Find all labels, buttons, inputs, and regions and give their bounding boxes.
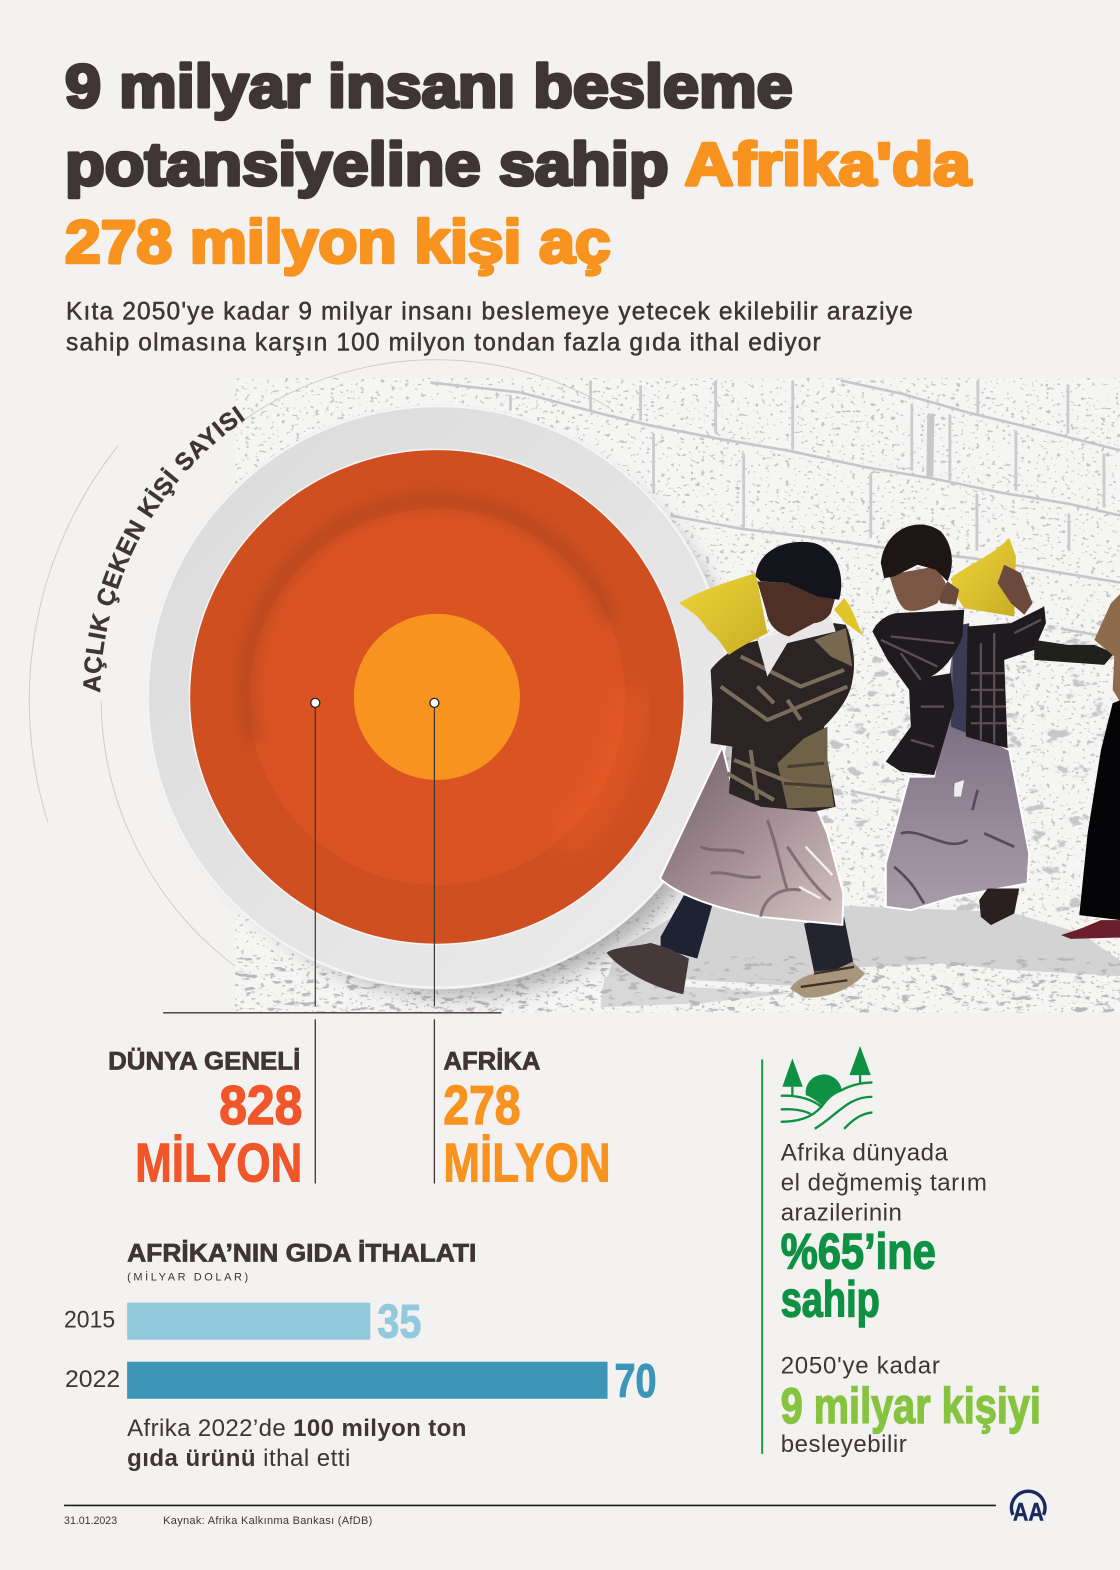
icon: agency logo: AA xyxy=(1013,1498,1044,1526)
bar 2022 xyxy=(65,1354,657,1407)
footer: 31.01.2023 xyxy=(64,1515,117,1527)
import note xyxy=(127,1415,466,1472)
bar 2022: 2022 xyxy=(65,1366,120,1393)
bar chart heading: (MİLYAR DOLAR) xyxy=(127,1271,248,1284)
photo: stone wall and ground background xyxy=(235,378,1120,1012)
icon: farmland with trees xyxy=(781,1046,872,1129)
title: 9 milyar insanı besleme xyxy=(65,53,793,120)
bar 2015: 2015 xyxy=(64,1307,115,1334)
text: feeding capacity by 2050: besleyebilir xyxy=(781,1431,907,1458)
subtitle: sahip olmasına karşın 100 milyon tondan fazla gıda ithal ediyor xyxy=(66,329,821,356)
africa hunger circle: 278 million xyxy=(354,614,520,780)
subtitle xyxy=(66,298,913,356)
world hunger circle: 828 million xyxy=(190,450,684,944)
green side panel xyxy=(762,1046,1041,1458)
stat: 65 percent: %65’ine xyxy=(781,1224,936,1280)
stat: africa total: 278 xyxy=(443,1074,520,1136)
title: Afrika'da xyxy=(685,131,972,198)
text: feeding capacity by 2050: 2050'ye kadar xyxy=(781,1353,940,1380)
footer: Kaynak: Afrika Kalkınma Bankası (AfDB) xyxy=(163,1515,372,1527)
import note: Afrika 2022’de 100 milyon ton xyxy=(127,1415,466,1442)
bar chart: food imports xyxy=(64,1295,657,1407)
stat: africa total: AFRİKA xyxy=(443,1047,540,1075)
icon: agency logo xyxy=(1011,1491,1045,1526)
stat: world total: 828 xyxy=(219,1074,302,1136)
bar chart heading xyxy=(127,1240,476,1284)
plate chart xyxy=(146,405,739,995)
stat: world total: DÜNYA GENELİ xyxy=(108,1046,300,1075)
plate well shading xyxy=(247,500,629,885)
stat: 65 percent xyxy=(781,1224,936,1328)
text: untouched farmland share: el değmemiş tarım xyxy=(781,1170,987,1197)
text: untouched farmland share: Afrika dünyada xyxy=(781,1139,948,1166)
child two xyxy=(872,524,1114,925)
child one xyxy=(607,542,865,998)
text: feeding capacity by 2050: 9 milyar kişiyi xyxy=(781,1378,1041,1434)
leader lines with markers xyxy=(163,698,501,1184)
stat: world total: MİLYON xyxy=(135,1131,302,1194)
stat: 65 percent: sahip xyxy=(781,1272,880,1328)
decorative arc lines around the plate xyxy=(29,360,611,966)
bar 2015: 35 xyxy=(377,1295,421,1348)
title: potansiyeline sahip xyxy=(65,131,669,198)
stat: africa total: MİLYON xyxy=(443,1131,611,1194)
text: feeding capacity by 2050 xyxy=(781,1353,1041,1458)
title: 278 milyon kişi aç xyxy=(65,208,611,275)
text: untouched farmland share: arazilerinin xyxy=(781,1200,902,1227)
stat: africa total xyxy=(443,1047,611,1194)
text: untouched farmland share xyxy=(781,1139,987,1227)
stat: world total xyxy=(108,1046,302,1194)
children carrying sacks xyxy=(607,524,1120,998)
bar chart heading: AFRİKA’NIN GIDA İTHALATI xyxy=(127,1240,476,1268)
footer xyxy=(64,1505,996,1527)
arc label: number of hungry people: AÇLIK ÇEKEN KİŞİ SAYISI xyxy=(83,406,245,692)
title xyxy=(65,53,972,275)
import note: gıda ürünü ithal etti xyxy=(127,1445,350,1472)
bar 2015 xyxy=(64,1295,421,1348)
child three xyxy=(1061,593,1120,939)
subtitle: Kıta 2050'ye kadar 9 milyar insanı beslemeye yetecek ekilebilir araziye xyxy=(66,298,913,325)
bar 2022: 70 xyxy=(615,1354,657,1407)
